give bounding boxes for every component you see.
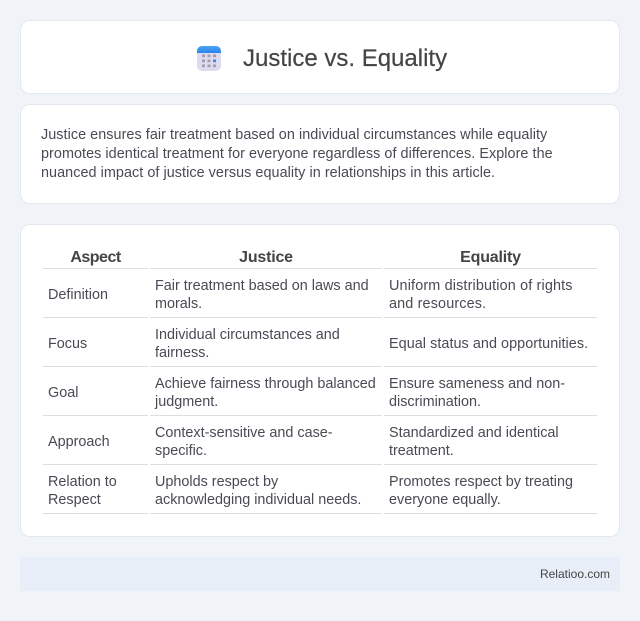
Focus: Justice: Individual circumstances and xyxy=(155,327,340,343)
heading: Justice vs. Equality xyxy=(243,45,447,72)
row: Definition: Definition xyxy=(48,287,108,303)
Relation: Justice: acknowledging individual needs. xyxy=(155,492,361,508)
Goal: Justice: Achieve fairness through balanced xyxy=(155,376,376,392)
Relation: Equality: everyone equally. xyxy=(389,492,501,508)
row: Goal: Goal xyxy=(48,385,78,401)
Approach: Justice xyxy=(155,425,333,459)
intro text: promotes identical treatment for everyone regardless of differences. Explore the xyxy=(41,146,553,162)
Definition: Equality xyxy=(389,278,573,312)
Definition: Justice: Fair treatment based on laws and xyxy=(155,278,369,294)
Goal: Justice xyxy=(154,376,376,410)
table header: Equality: Equality xyxy=(460,249,521,266)
Approach: Equality: treatment. xyxy=(389,443,454,459)
panel: title xyxy=(20,20,620,94)
Relation: Justice: Upholds respect by xyxy=(155,474,278,490)
row: Approach: Approach xyxy=(48,434,110,450)
Approach: Justice: Context-sensitive and case- xyxy=(155,425,333,441)
intro text: nuanced impact of justice versus equality in relationships in this article. xyxy=(41,165,495,181)
Goal: Equality: discrimination. xyxy=(389,394,481,410)
Relation: Justice xyxy=(155,474,361,508)
Definition: Justice: morals. xyxy=(155,296,202,312)
footer credit: Relatioo.com xyxy=(540,567,610,581)
row: Relation to Respect: Respect xyxy=(48,492,101,508)
Goal: Equality: Ensure sameness and non- xyxy=(389,376,565,392)
Focus: Justice xyxy=(155,327,340,361)
Definition: Equality: Uniform distribution of rights xyxy=(389,278,573,294)
Approach: Justice: specific. xyxy=(155,443,207,459)
panel: introduction xyxy=(20,104,620,204)
Relation: Equality xyxy=(389,474,573,508)
row: Relation to Respect: Relation to xyxy=(48,474,117,490)
Definition: Justice xyxy=(155,278,369,312)
Focus: Justice: fairness. xyxy=(155,345,209,361)
icon: calendar xyxy=(197,46,221,71)
Definition: Equality: and resources. xyxy=(389,296,486,312)
intro text xyxy=(41,127,553,181)
intro text: Justice ensures fair treatment based on individual circumstances while equality xyxy=(41,127,547,143)
Relation: Equality: Promotes respect by treating xyxy=(389,474,573,490)
Focus: Equality: Equal status and opportunities. xyxy=(389,336,588,352)
Approach: Equality xyxy=(389,425,559,459)
footer xyxy=(20,557,620,591)
table header: Aspect: Aspect xyxy=(70,249,121,266)
table header: Justice: Justice xyxy=(239,249,293,266)
panel: comparison table xyxy=(20,224,620,537)
Goal: Justice: judgment. xyxy=(155,394,218,410)
Approach: Equality: Standardized and identical xyxy=(389,425,559,441)
row: Relation to Respect xyxy=(48,474,117,508)
Goal: Equality xyxy=(389,376,565,410)
row: Focus: Focus xyxy=(48,336,87,352)
